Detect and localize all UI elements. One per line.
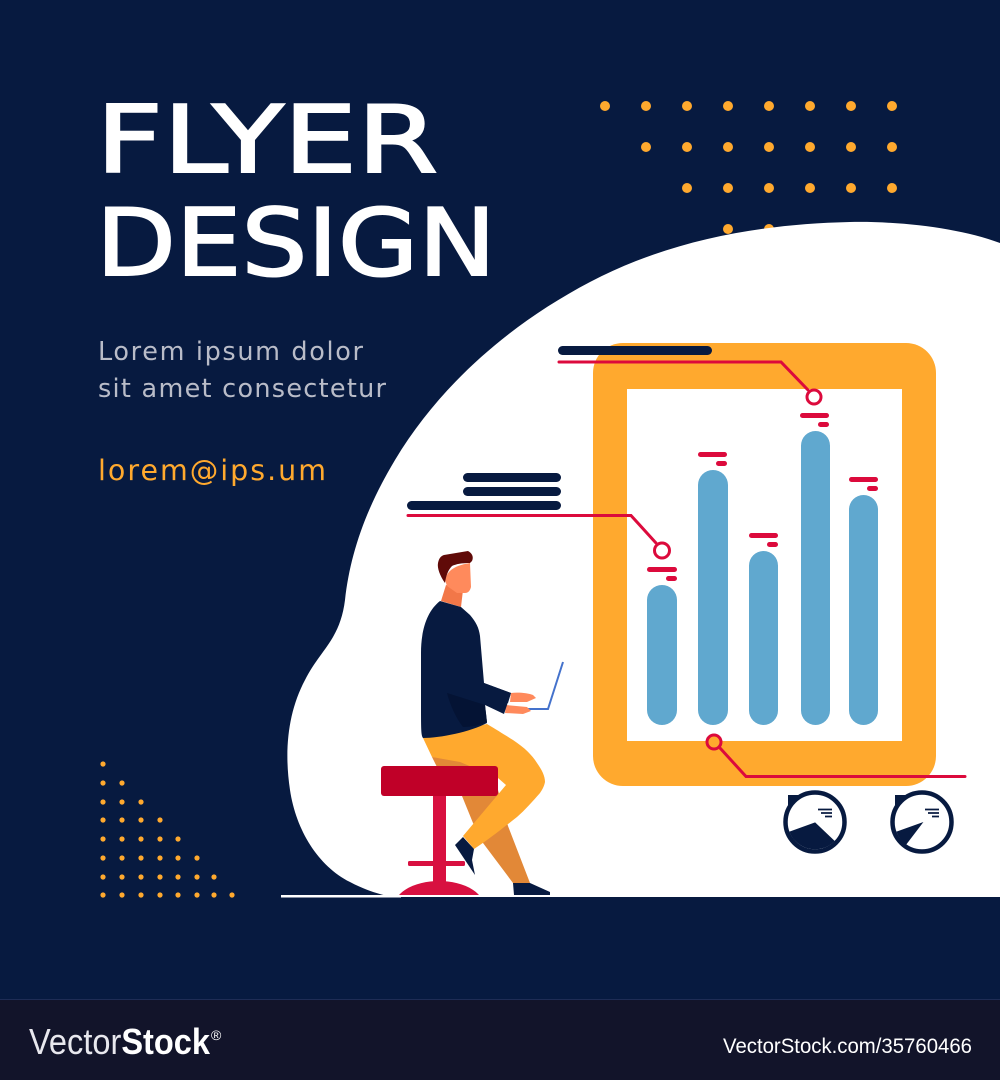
hair [438, 551, 473, 583]
white blob background [287, 222, 1000, 897]
email: lorem@ips.um [98, 454, 326, 487]
callout: bottom [707, 735, 965, 776]
tablet screen [627, 389, 902, 741]
dot pattern: bottom left [100, 761, 235, 898]
tablet with bar chart [593, 343, 936, 786]
laptop [527, 662, 563, 709]
front shoe [455, 837, 475, 875]
person on stool [381, 551, 563, 895]
registered mark: ® [211, 1027, 222, 1043]
head [445, 563, 471, 593]
footer [0, 999, 1000, 1080]
back shoe [513, 883, 550, 895]
gauge: right [892, 792, 952, 852]
subtitle [98, 337, 387, 404]
torso [421, 601, 511, 738]
gauge: left [786, 792, 844, 852]
title: FLYER [96, 86, 438, 194]
title: DESIGN [96, 189, 496, 297]
neck [441, 585, 463, 607]
back leg [432, 757, 530, 883]
callout: left [407, 473, 670, 558]
tablet frame [593, 343, 936, 786]
footer logo: VectorStock [29, 1021, 211, 1062]
footer url: VectorStock.com/35760466 [723, 1035, 972, 1058]
far arm [483, 683, 511, 703]
front leg [423, 724, 545, 849]
hands [510, 693, 536, 702]
stool [381, 766, 498, 895]
bars [647, 431, 878, 725]
title [96, 86, 496, 297]
dot pattern: top right [600, 101, 897, 234]
subtitle: sit amet consectetur [98, 374, 387, 404]
ground line [281, 895, 401, 898]
callout: top [558, 346, 821, 404]
bar value labels [647, 413, 878, 581]
sweater fold shadow [447, 693, 487, 727]
subtitle: Lorem ipsum dolor [98, 337, 364, 367]
